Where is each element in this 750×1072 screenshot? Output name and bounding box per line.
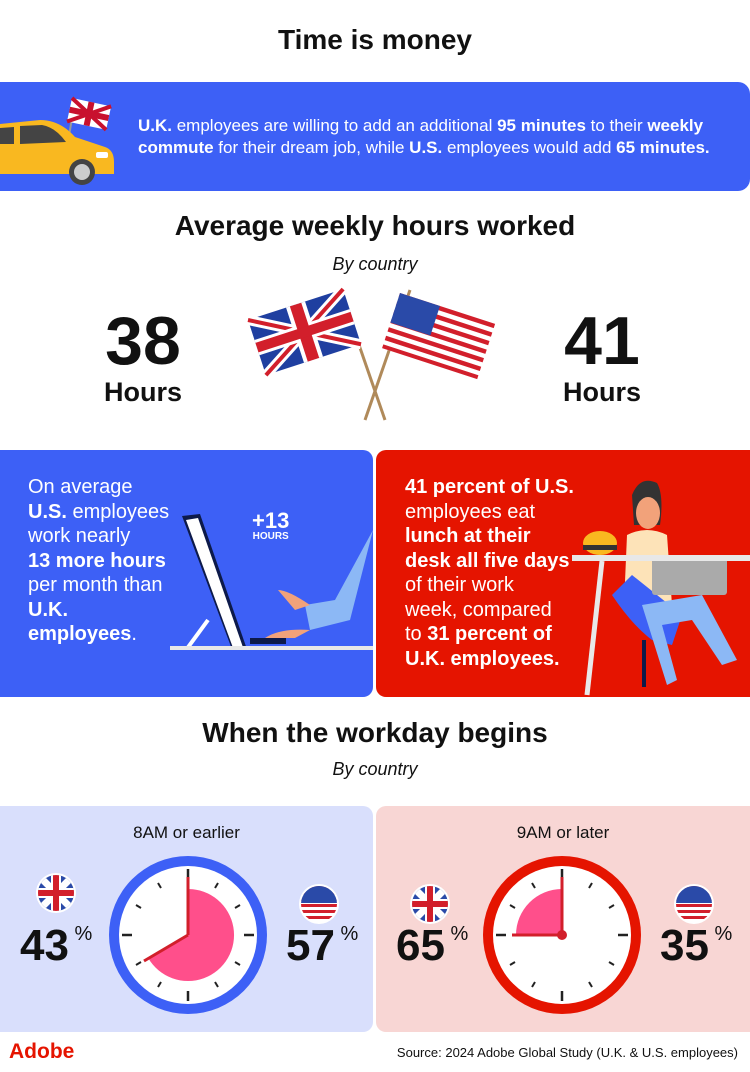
label: 9AM or later (517, 823, 609, 842)
label: 8AM or earlier (133, 823, 240, 842)
text: lunch (405, 476, 574, 670)
text: lunch: lunch at their (405, 525, 531, 547)
stat: UK 65%: 65 % (396, 921, 468, 970)
heading: workday: When the workday begins (202, 717, 548, 748)
icon: computer and hands (170, 514, 373, 650)
icon: UK flag circle (410, 884, 450, 924)
text: hours (28, 476, 169, 645)
text: lunch: week, compared (405, 598, 552, 620)
stat: UK 38 hours: 38 (105, 303, 181, 379)
icon: car with UK flag (0, 96, 114, 185)
text: hours: employees. (28, 623, 137, 645)
stat: US 57%: 57 % (286, 921, 358, 970)
title: Time is money (278, 24, 472, 55)
source note: Source: 2024 Adobe Global Study (U.K. & U.S. employees) (397, 1045, 738, 1060)
icon: US flag circle (299, 884, 339, 924)
stat: UK 38 hours: Hours (104, 377, 182, 407)
chart: clock 9am (483, 856, 641, 1014)
text: hours: work nearly (28, 525, 130, 547)
text: lunch: desk all five days (405, 550, 570, 572)
text: hours: 13 more hours (28, 550, 166, 572)
text: lunch: to 31 percent of (405, 623, 552, 645)
panel: 9AM or later (376, 806, 750, 1032)
label: +13 hours: +13 (252, 508, 289, 533)
text: lunch: of their work (405, 574, 514, 596)
subheading: By country (332, 254, 418, 274)
banner: commute (0, 82, 750, 191)
heading: weekly hours: Average weekly hours worked (175, 210, 575, 241)
icon: crossed flags (248, 288, 496, 420)
icon: UK flag circle (36, 873, 76, 913)
stat: US 41 hours: 41 (564, 303, 640, 379)
text: hours: per month than (28, 574, 163, 596)
text: lunch: employees eat (405, 500, 535, 522)
panel: more hours (0, 450, 373, 697)
stat: UK 43%: 43 % (20, 921, 92, 970)
banner text: U.K. employees are willing to add an additional 95 minutes to their weekly commute for their dream job, while U.S. employees would add 65 minutes. (138, 116, 710, 157)
stat: US 35%: 35 % (660, 921, 732, 970)
icon: US flag circle (674, 884, 714, 924)
panel: lunch at desk (376, 450, 750, 697)
icon: woman at desk (572, 480, 750, 696)
panel: 8AM or earlier (0, 806, 373, 1032)
text: hours: On average (28, 476, 133, 498)
text: hours: U.K. (28, 598, 68, 620)
chart: clock 8am (109, 856, 267, 1014)
subheading: By country (332, 759, 418, 779)
stat: US 41 hours: Hours (563, 377, 641, 407)
text: lunch: 41 percent of U.S. (405, 476, 574, 498)
text: lunch: U.K. employees. (405, 648, 560, 670)
label: +13 hours: HOURS (253, 531, 289, 542)
text: hours: U.S. employees (28, 500, 169, 522)
logo: Adobe: Adobe (9, 1040, 74, 1063)
